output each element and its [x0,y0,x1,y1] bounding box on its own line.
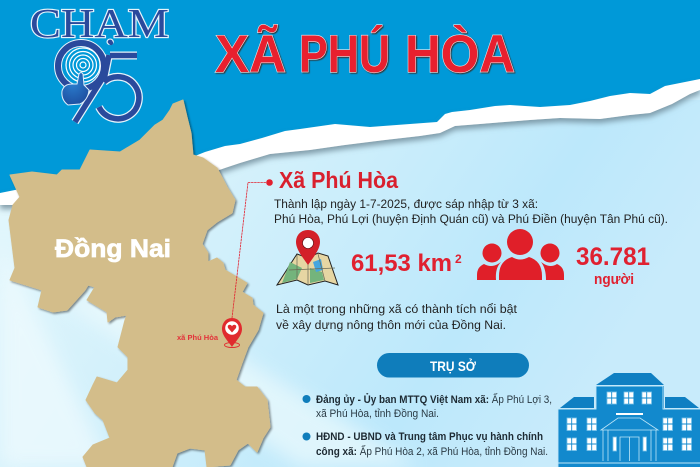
headquarters item 1: xã Phú Hòa, tỉnh Đồng Nai. [316,408,439,420]
icon: people [477,229,564,280]
stat: area: 61,53 km [351,250,452,277]
stat: population: 36.781 [576,243,650,271]
logo dot [109,41,113,45]
icon: building [558,373,700,467]
headquarters badge: TRỤ SỞ [430,357,476,374]
headquarters item 2 [302,431,548,458]
achievement text: về xây dựng nông thôn mới của Đồng Nai. [276,318,506,332]
achievement text: Là một trong những xã có thành tích nổi bật [276,302,518,316]
logo wordmark: CHẠM [30,0,169,46]
map location label: xã Phú Hòa [177,333,219,342]
title [215,24,515,84]
headquarters item 2: công xã: Ấp Phú Hòa 2, xã Phú Hòa, tỉnh Đồng Nai. [316,445,548,458]
headquarters item 1 [302,393,552,420]
commune heading: Xã Phú Hòa [279,167,398,193]
stat: area superscript: 2 [455,252,462,266]
founding description [274,197,668,226]
headquarters badge [377,353,529,378]
logo fingerprint [66,48,100,82]
map: Đồng Nai province [9,100,270,467]
stat: population unit: người [594,272,634,288]
connector line [232,179,273,318]
logo hand [62,72,89,105]
map label: Đồng Nai [55,235,171,263]
logo: Chạm 95 [30,0,169,122]
icon: map with pin [277,230,338,285]
logo number 95 [58,43,139,122]
founding description: Phú Hòa, Phú Lợi (huyện Định Quán cũ) và Phú Điền (huyện Tân Phú cũ). [274,212,668,226]
headquarters item 2: HĐND - UBND và Trung tâm Phục vụ hành chính [316,431,543,443]
headquarters item 1: Đảng ủy - Ủy ban MTTQ Việt Nam xã: Ấp Phú Lợi 3, [316,393,552,406]
location pin on map [222,318,242,348]
achievement text [276,302,518,332]
top blue band [0,0,700,198]
lower background [0,100,700,467]
founding description: Thành lập ngày 1-7-2025, được sáp nhập từ 3 xã: [274,197,538,211]
title: XÃ [215,24,286,84]
torn paper edge [0,79,700,205]
title: PHÚ [299,24,390,84]
title: HÒA [405,24,515,84]
